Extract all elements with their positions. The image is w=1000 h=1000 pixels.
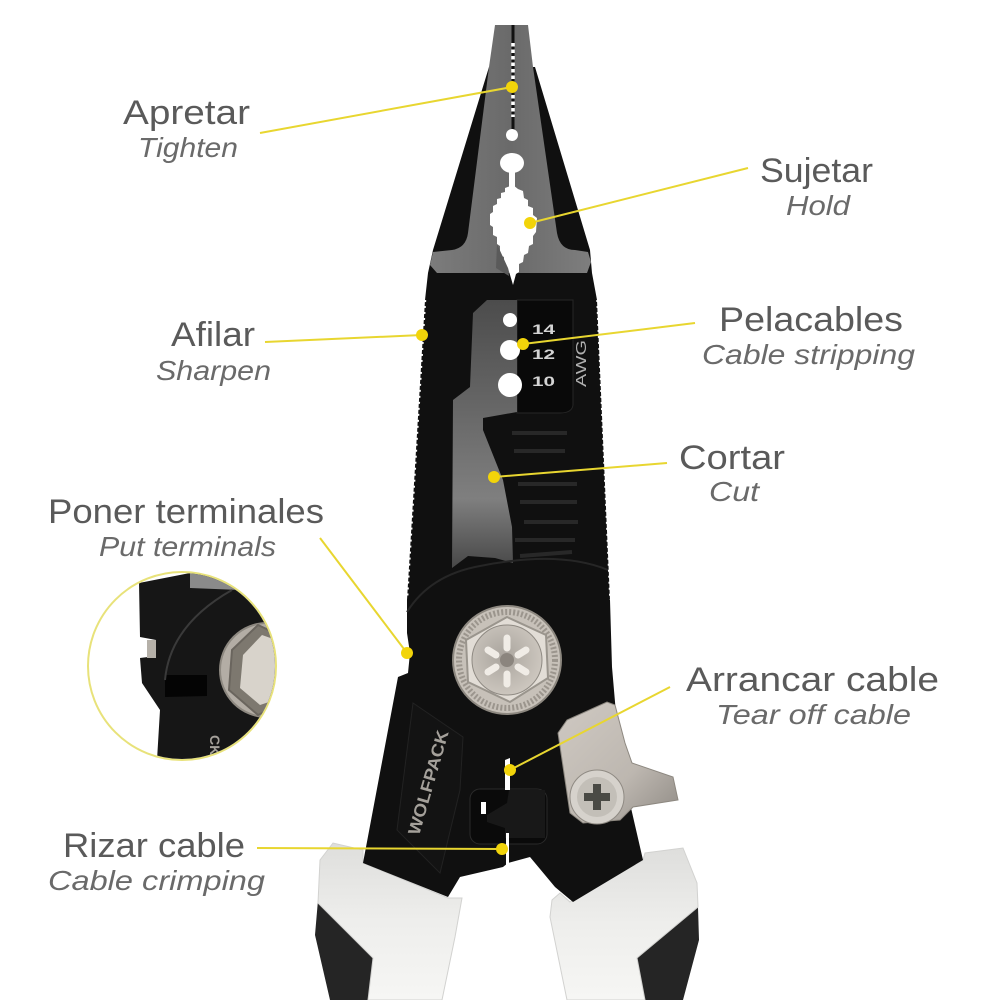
callout: Apretar: Tighten: [138, 132, 238, 163]
inset close-up: [139, 573, 275, 759]
stripper recess: [517, 300, 573, 413]
callout: Poner terminales: [48, 493, 413, 659]
handle ridges: [512, 433, 578, 556]
black pliers body: [363, 67, 643, 902]
cutting blade and stripper plate: [452, 300, 517, 568]
right handle: [550, 848, 699, 1000]
left handle: [315, 843, 462, 1000]
inset close-up: CK: [207, 735, 223, 755]
crimping window: [470, 758, 547, 865]
callout: Afilar: [156, 316, 428, 386]
callout: Poner terminales: Put terminals: [99, 531, 276, 562]
gauge numbers: 10: [532, 373, 555, 389]
callout: Pelacables: Pelacables: [719, 301, 903, 339]
callout: Arrancar cable: [504, 661, 939, 776]
pliers illustration: [315, 25, 699, 1000]
callout: Sujetar: Hold: [786, 190, 852, 221]
callout: Afilar: Afilar: [171, 316, 255, 354]
callout: Rizar cable: Rizar cable: [63, 827, 245, 865]
callout: Rizar cable: Cable crimping: [48, 865, 265, 896]
callout: Arrancar cable: Tear off cable: [716, 699, 911, 730]
jaw split and openings: [490, 25, 537, 285]
callout: Sujetar: Sujetar: [760, 152, 873, 190]
AWG mark: AWG: [573, 340, 590, 387]
callout: Poner terminales: Poner terminales: [48, 493, 324, 531]
callout: Sujetar: [524, 152, 873, 229]
serrated edges: [407, 300, 610, 600]
callout: Afilar: Sharpen: [156, 355, 271, 386]
gauge numbers: 12: [532, 346, 555, 362]
brand panel: WOLFPACK: [405, 727, 453, 837]
brand panel: [397, 703, 463, 873]
callout: Arrancar cable: Arrancar cable: [686, 661, 939, 699]
callout: Apretar: [123, 81, 518, 163]
pivot collar: [407, 559, 608, 612]
wire gauge holes: [498, 313, 522, 397]
stripping lever: [558, 702, 678, 824]
callout: Cortar: Cortar: [679, 439, 785, 477]
callout: Pelacables: Cable stripping: [702, 339, 915, 370]
gauge numbers: 14: [532, 321, 555, 337]
gauge numbers: [532, 321, 555, 389]
silver jaw: [430, 25, 591, 273]
callout: Cortar: [488, 439, 785, 507]
inset detail: terminal crimping zone: [87, 571, 277, 761]
callout: Pelacables: [517, 301, 915, 370]
callout: Apretar: Apretar: [123, 94, 250, 132]
pivot bolt: [453, 606, 561, 714]
inset ring: [88, 572, 276, 760]
callout: Cortar: Cut: [709, 476, 760, 507]
callout: Rizar cable: [48, 827, 508, 896]
